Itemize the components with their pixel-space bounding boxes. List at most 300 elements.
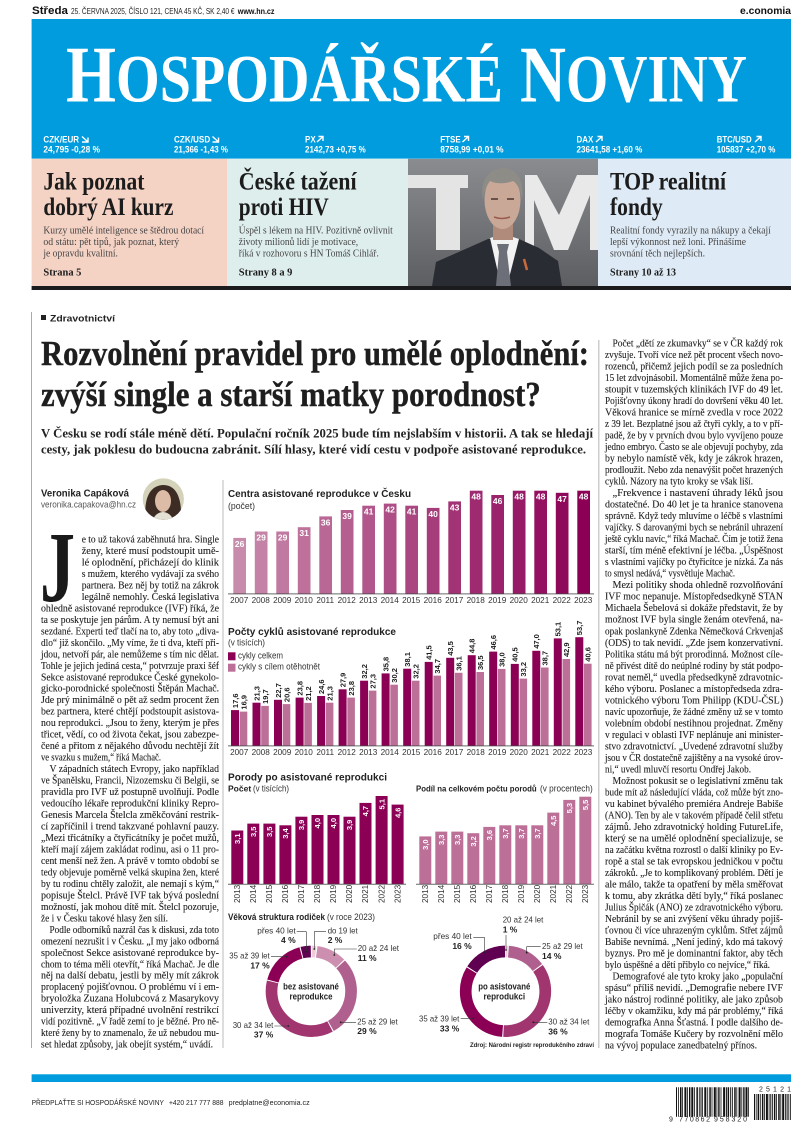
- value labels: 22,7: [274, 683, 283, 698]
- bar chart: porody počet: 2013: [233, 884, 242, 903]
- bar chart: Centra asistované reprodukce: 2010: [295, 596, 313, 605]
- bar chart: podíl na celkovém počtu porodů: 3,3: [453, 835, 462, 845]
- bar chart: Počty cyklů asistované reprodukce: 2007: [230, 748, 249, 757]
- bar chart: Centra asistované reprodukce: 2012: [338, 596, 356, 605]
- donut chart: po asistované reprodukci: [419, 915, 590, 1036]
- article text: left column: pravidla pro IVF už postupně uvolňují. Podle: [41, 786, 219, 798]
- value labels: 53,7: [575, 621, 584, 635]
- teaser panel: TOP realitní fondy: Realitní fondy vyrazily na nákupy a čekají: [610, 224, 771, 236]
- top date line: www.hn.cz: [237, 7, 274, 16]
- article text: right column: Věková hranice se mírně zvedla v roce 2022: [605, 407, 783, 419]
- bar chart: Centra asistované reprodukce: 2020: [510, 596, 528, 605]
- donut chart: po asistované reprodukci: 35 až 39 let: [419, 1013, 460, 1023]
- bar chart: Centra asistované reprodukce: 2018: [467, 596, 485, 605]
- bar chart: podíl na celkovém počtu porodů: 3,0: [421, 839, 430, 850]
- value labels: 24,6: [317, 679, 326, 694]
- teaser panel: HIV: říká v rozhovoru s HN Tomáš Cihlář.: [239, 248, 379, 260]
- footer subscription line: +420 217 777 888: [169, 1098, 224, 1107]
- bar chart: porody počet: 3,5: [265, 827, 274, 837]
- newspaper title: OSPODÁŘSKÉ: [116, 41, 503, 117]
- article text: right column: [604, 338, 783, 1052]
- bar chart: Počty cyklů asistované reprodukce: 2009: [273, 748, 292, 757]
- article text: left column: popisuje Štelcl. Právě IVF tak bývá poslední: [41, 889, 219, 901]
- footer subscription line: predplatne@economia.cz: [229, 1098, 310, 1107]
- bar chart: podíl na celkovém počtu porodů: 4,5: [549, 816, 558, 826]
- value labels: 53,1: [554, 622, 563, 636]
- newspaper title: H: [66, 30, 116, 120]
- heading: Věková struktura rodiček: Věková struktura rodiček: [228, 912, 326, 922]
- article text: right column: spásu“ příliš nevidí. „Demografie nebere IVF: [605, 982, 783, 994]
- bar chart: podíl na celkovém počtu porodů: 2023: [581, 884, 590, 903]
- article text: right column: jako nástroj rodinné politiky, ale jako způsob: [604, 994, 783, 1006]
- bar chart: porody počet: 4,7: [361, 806, 370, 816]
- bar chart: Centra asistované reprodukce: 40: [428, 509, 438, 519]
- bar chart: porody počet: 4,6: [393, 808, 402, 818]
- value labels: 43,5: [446, 641, 455, 656]
- donut chart: bez asistované reprodukce: 4 %: [281, 935, 296, 945]
- article text: left column: tedy objevuje poměrně velká skupina žen, které: [41, 866, 219, 878]
- article text: right column: kého výboru. Poslanec a místopředseda zdra-: [605, 683, 783, 695]
- bar chart: Centra asistované reprodukce: 31: [299, 528, 309, 538]
- article text: left column: ženy, které musí podstoupit umě-: [82, 545, 219, 557]
- bar chart: Centra asistované reprodukce: 46: [493, 496, 503, 506]
- article text: right column: bylo úspěšné a dětí přibylo co nejvíce,“ říká.: [605, 959, 770, 971]
- article text: left column: možností, jak mohou dítě mít. Štelcl pozoruje,: [41, 901, 219, 913]
- article text: left column: set hledat způsoby, jak obejít systém,“ uvádí.: [41, 1039, 213, 1051]
- article text: right column: dostatečné. Do 40 let je ta hranice stanovena: [605, 499, 783, 511]
- bar chart: porody počet: 3,5: [249, 827, 258, 837]
- photo: Tomáš Cihlář: [408, 159, 598, 286]
- barcode: 9: [669, 1117, 673, 1124]
- bar chart: podíl na celkovém počtu porodů: 2013: [421, 884, 430, 903]
- newspaper title: OVINY: [566, 41, 747, 117]
- bar chart: podíl na celkovém počtu porodů: Podíl na celkovém počtu porodů: [416, 784, 537, 794]
- donut chart: bez asistované reprodukce: 37 %: [254, 1030, 274, 1040]
- article text: left column: Podle odborníků nazrál čas k diskusi, zda toto: [50, 924, 219, 936]
- article text: left column: bez partnera, které chtějí podstoupit asistova-: [41, 706, 219, 718]
- article text: left column: ve Španělsku, Francii, Nizozemsku či Belgii, se: [41, 775, 219, 787]
- article text: left column: něj na další debatu, jestli by měly mít zákrok: [41, 970, 219, 982]
- bar chart: Centra asistované reprodukce: 2021: [531, 596, 550, 605]
- bar chart: Počty cyklů asistované reprodukce: 2011: [316, 748, 334, 757]
- article text: right column: ni,“ uvedl mluvčí resortu Ondřej Jakob.: [605, 763, 751, 775]
- bar chart: podíl na celkovém počtu porodů: 2018: [501, 884, 510, 903]
- drop cap: J: [40, 511, 75, 623]
- bar chart: Centra asistované reprodukce: 48: [536, 492, 546, 502]
- bar chart: podíl na celkovém počtu porodů: 2019: [517, 884, 526, 903]
- lead paragraph: [41, 427, 594, 456]
- value labels: 21,2: [304, 686, 313, 701]
- bar chart: Centra asistované reprodukce: (počet): [228, 501, 255, 511]
- value labels: [231, 621, 593, 710]
- heading: Věková struktura rodiček: (v roce 2023): [327, 912, 375, 922]
- donut chart: bez asistované reprodukce: reprodukce: [290, 992, 332, 1002]
- footer subscription line: [32, 1098, 310, 1107]
- bar chart: podíl na celkovém počtu porodů: 2016: [469, 884, 478, 903]
- bar chart: porody počet: 3,1: [233, 834, 242, 844]
- bar chart: Centra asistované reprodukce: 29: [278, 532, 288, 542]
- bar chart: Centra asistované reprodukce: 47: [557, 494, 567, 504]
- bar chart: Centra asistované reprodukce: 43: [450, 502, 460, 512]
- top date line: e.conomia: [740, 5, 791, 17]
- article text: left column: čené a přitom z nějakého důvodu nechtějí žít: [41, 740, 219, 752]
- donut chart: po asistované reprodukci: 1 %: [503, 925, 518, 935]
- bar chart: Počty cyklů asistované reprodukce: 2012: [338, 748, 356, 757]
- teaser panel: AI kurz: dobrý AI kurz: [43, 194, 173, 221]
- article text: right column: možnost IVF byla single ženám otevřená, na-: [605, 614, 783, 626]
- teaser panel: TOP realitní fondy: TOP realitní: [610, 168, 727, 195]
- article text: left column: sezdané. Experti teď tlačí na to, aby toto „diva-: [41, 625, 219, 637]
- bar chart: podíl na celkovém počtu porodů: 3,7: [501, 828, 510, 839]
- article text: left column: „Mezi třicátníky a čtyřicátníky je počet mužů,: [41, 832, 219, 844]
- article text: left column: dlo“ již skončilo. „My víme, že ti dva, kteří při-: [41, 637, 219, 649]
- main headline: [41, 334, 589, 414]
- footer subscription line: PŘEDPLAŤTE SI HOSPODÁŘSKÉ NOVINY: [32, 1098, 164, 1107]
- market tickers: 2142,73 +0,75 %: [305, 144, 366, 154]
- bar chart: podíl na celkovém počtu porodů: (v procentech): [540, 784, 593, 794]
- article text: left column: chom to téma měli otevřít,“ říká Machač. Je dle: [41, 958, 219, 970]
- bar chart: Centra asistované reprodukce: 48: [579, 492, 589, 502]
- donut chart: po asistované reprodukci: 20 až 24 let: [503, 915, 544, 925]
- article text: left column: V západních státech Evropy, jako například: [50, 763, 219, 775]
- article text: right column: Mezi politiky shoda ohledně rozvolňování: [612, 579, 783, 591]
- market tickers: 8758,99 +0,01 %: [440, 144, 504, 154]
- article text: right column: k tomu, aby zkrátka dětí byly,“ říká poslanec: [605, 890, 783, 902]
- bar chart: podíl na celkovém počtu porodů: 2022: [565, 884, 574, 903]
- market tickers: 105837 +2,70 %: [717, 144, 775, 154]
- donut chart: bez asistované reprodukce: do 19 let: [328, 925, 358, 935]
- donut chart: bez asistované reprodukce: [229, 925, 400, 1040]
- value labels: 42,9: [562, 642, 571, 657]
- barcode: 25121: [759, 1087, 791, 1094]
- bar chart: porody počet: 5,1: [377, 799, 386, 809]
- market tickers: 21,366 -1,43 %: [174, 144, 228, 154]
- top date line: Středa: [32, 5, 69, 17]
- article text: left column: vedoucího lékaře reprodukční kliniky Repro-: [41, 798, 219, 810]
- bar chart: Počty cyklů asistované reprodukce: (v tisících): [228, 638, 265, 648]
- bar chart: porody počet: 2021: [361, 884, 370, 903]
- value labels: 19,7: [261, 689, 270, 704]
- bar chart: porody počet: 2023: [393, 884, 402, 903]
- footer bar: [32, 1074, 791, 1082]
- donut chart: bez asistované reprodukce: 25 až 29 let: [357, 1016, 398, 1026]
- barcode: 958320: [714, 1117, 747, 1124]
- bar chart: porody počet: (v tisících): [253, 784, 289, 794]
- donut chart: po asistované reprodukci: přes 40 let: [433, 931, 472, 941]
- article text: left column: Tohle je jejich jediná cesta,“ potvrzuje praxi šéf: [41, 660, 219, 672]
- bar chart: Centra asistované reprodukce: 42: [385, 505, 395, 515]
- donut chart: bez asistované reprodukce: 30 až 34 let: [233, 1020, 274, 1030]
- value labels: 40,6: [584, 647, 593, 662]
- bar chart: Centra asistované reprodukce: 41: [364, 507, 374, 517]
- article text: left column: že i v Česku takové hlasy žen sílí.: [41, 912, 168, 924]
- heading: Porody po asistované reprodukci: Porody po asistované reprodukci: [228, 772, 387, 784]
- bar chart: Počty cyklů asistované reprodukce: 2014: [381, 748, 399, 757]
- article text: right column: cyklů. Názory na tyto kroky se však liší.: [605, 476, 753, 488]
- icon: author portrait: [143, 478, 184, 522]
- teaser panel: HIV: České tažení: [239, 166, 358, 195]
- bar chart: Centra asistované reprodukce: 2015: [402, 596, 421, 605]
- value labels: 23,8: [295, 681, 304, 696]
- value labels: 30,2: [390, 668, 399, 683]
- bar chart: Počty cyklů asistované reprodukce: 2010: [295, 748, 313, 757]
- bar chart: Centra asistované reprodukce: 2019: [488, 596, 507, 605]
- market tickers: CZK/USD: [174, 134, 211, 144]
- value labels: 33,2: [519, 662, 528, 677]
- bar chart: podíl na celkovém počtu porodů: 3,6: [485, 830, 494, 840]
- article text: right column: votnického výboru Tom Philipp (KDU-ČSL): [605, 694, 783, 706]
- bar chart: porody počet: 2018: [313, 884, 322, 903]
- bar chart: podíl na celkovém počtu porodů: 2020: [533, 884, 542, 903]
- article text: right column: mografa Tomáše Kučery by rozvolnění mělo: [605, 1028, 783, 1040]
- lead paragraph: V Česku se rodí stále méně dětí. Populační ročník 2025 bude tím nejslabším v historii. A tak se hledají: [41, 427, 594, 441]
- bar chart: Počty cyklů asistované reprodukce: 2016: [424, 748, 442, 757]
- teaser panel: HIV: životy milionů lidí je motivace,: [239, 236, 358, 248]
- teaser panel: AI kurz: Kurzy umělé inteligence se štědrou dotací: [43, 224, 204, 236]
- donut chart: po asistované reprodukci: reprodukci: [483, 992, 525, 1002]
- teaser panel: HIV: Úspěl s lékem na HIV. Pozitivně ovlivnit: [239, 224, 393, 236]
- bar chart: podíl na celkovém počtu porodů: 3,2: [469, 836, 478, 847]
- bar chart: porody počet: 4,0: [313, 818, 322, 828]
- bar chart: Počty cyklů asistované reprodukce: Počty cyklů asistované reprodukce: [228, 626, 396, 638]
- value labels: 20,6: [282, 687, 291, 702]
- bar chart: podíl na celkovém počtu porodů: 2014: [437, 884, 446, 903]
- bar chart: Centra asistované reprodukce: 2007: [230, 596, 249, 605]
- article text: right column: by nebylo namístě věk, kdy je zákrok hrazen,: [605, 453, 783, 465]
- bar chart: porody počet: 2020: [345, 884, 354, 903]
- bar chart: Centra asistované reprodukce: 39: [342, 511, 352, 521]
- value labels: 23,8: [347, 681, 356, 696]
- value labels: 16,9: [239, 695, 248, 710]
- article text: right column: na vývoj populace zanedbatelný přínos.: [605, 1040, 757, 1052]
- donut chart: po asistované reprodukci: po asistované: [478, 982, 530, 992]
- value labels: 38,1: [403, 652, 412, 667]
- value labels: 27,3: [368, 674, 377, 689]
- value labels: 41,5: [424, 645, 434, 660]
- article text: left column: cent menší než žen. A právě v tomto období se: [41, 855, 219, 867]
- article text: right column: „Frekvence i nastavení úhrady léků jsou: [612, 487, 783, 499]
- article text: left column: jdou, netvoří pár, ale nemůžeme s tím nic dělat.: [40, 648, 219, 660]
- bar chart: porody počet: 3,9: [345, 820, 354, 830]
- barcode: [669, 1087, 791, 1124]
- top date line: [32, 5, 791, 17]
- article text: left column: Jde prý minimálně o pět až sedm procent žen: [41, 694, 219, 706]
- teaser panel: TOP realitní fondy: Strany 10 až 13: [610, 266, 676, 278]
- value labels: 21,3: [325, 686, 334, 701]
- article text: left column: nou reprodukci. „Jsou to ženy, kterým je přes: [41, 717, 219, 729]
- donut chart: po asistované reprodukci: 25 až 29 let: [542, 941, 583, 951]
- bar chart: Počty cyklů asistované reprodukce: 2019: [488, 748, 507, 757]
- value labels: 44,8: [468, 639, 476, 653]
- bar chart: Počty cyklů asistované reprodukce: 2021: [531, 748, 550, 757]
- donut chart: bez asistované reprodukce: bez asistované: [283, 982, 339, 992]
- donut chart: po asistované reprodukci: 16 %: [452, 941, 472, 951]
- article text: right column: to smysl nedává,“ vysvětluje Machač.: [605, 568, 735, 580]
- article text: left column: Genesis Marcela Štelcla změkčování restrik-: [41, 809, 219, 821]
- market tickers: [43, 134, 775, 154]
- donut chart: bez asistované reprodukce: 17 %: [250, 960, 270, 970]
- article text: left column: Sekce asistované reprodukce České gynekolo-: [41, 671, 219, 683]
- donut chart: bez asistované reprodukce: 35 až 39 let: [229, 950, 270, 960]
- value labels: 40,5: [511, 647, 520, 662]
- donut chart: po asistované reprodukci: 36 %: [548, 1026, 568, 1036]
- article text: left column: které ženy by to znamenalo, že už nebudou mu-: [41, 1027, 219, 1039]
- teaser panel: TOP realitní fondy: lepší výkonnost než loni. Přinášíme: [610, 236, 746, 248]
- teaser panel: TOP realitní fondy: [598, 159, 791, 286]
- teaser panel: HIV: proti HIV: [239, 194, 329, 221]
- teaser panel: AI kurz: Jak poznat: [43, 168, 145, 195]
- article text: left column: ve svazku s mužem,“ říká Machač.: [41, 752, 161, 764]
- bar chart: Počty cyklů asistované reprodukce: [228, 621, 594, 757]
- donut chart: po asistované reprodukci: 14 %: [542, 951, 562, 961]
- bar chart: porody počet: 2015: [265, 884, 274, 903]
- value labels: 27,9: [338, 673, 347, 687]
- market tickers: PX: [305, 134, 316, 144]
- bar chart: podíl na celkovém počtu porodů: 2017: [485, 884, 494, 903]
- article text: left column: [40, 534, 219, 1051]
- top date line: 25. ČERVNA 2025, ČÍSLO 121, CENA 45 KČ, SK 2,40 €: [71, 7, 235, 16]
- bar chart: Počty cyklů asistované reprodukce: 2018: [467, 748, 485, 757]
- market tickers: 24,795 -0,28 %: [43, 144, 100, 154]
- value labels: 47,0: [532, 634, 541, 649]
- donut chart: bez asistované reprodukce: 20 až 24 let: [358, 943, 400, 953]
- masthead panel: [32, 19, 791, 159]
- author byline: veronika.capakova@hn.cz: [41, 499, 136, 509]
- article text: left column: proplacený pojišťovnou. O problému ví i em-: [41, 981, 219, 993]
- article text: left column: legálně nemohly. Česká legislativa: [82, 591, 219, 603]
- bar chart: porody počet: 2016: [281, 884, 290, 903]
- bar chart: Centra asistované reprodukce: 2011: [316, 596, 334, 605]
- bar chart: Počty cyklů asistované reprodukce: 2013: [359, 748, 378, 757]
- article text: left column: univerzity, která případné uvolnění restrikcí: [41, 1004, 219, 1016]
- newspaper title: N: [520, 30, 566, 120]
- bar chart: Centra asistované reprodukce: 2017: [445, 596, 464, 605]
- value labels: 32,2: [360, 664, 369, 679]
- bar chart: Centra asistované reprodukce: Centra asistované reprodukce v Česku: [228, 487, 411, 500]
- bar chart: Centra asistované reprodukce: [228, 487, 594, 605]
- article text: left column: společnost Sekce asistované reprodukce by-: [41, 947, 219, 959]
- value labels: 32,2: [412, 664, 420, 679]
- black divider bar: [32, 286, 791, 290]
- bar chart: Centra asistované reprodukce: 2014: [381, 596, 399, 605]
- bar chart: porody počet: 4,0: [329, 818, 338, 828]
- newspaper title: [66, 30, 747, 120]
- bar chart: Centra asistované reprodukce: 41: [407, 507, 417, 517]
- article text: left column: by tu rodinu chtěly založit, ale nemají s kým,“: [41, 878, 219, 890]
- bar chart: porody počet: 2014: [249, 884, 258, 903]
- column rules: [31, 312, 600, 1048]
- value labels: 35,8: [381, 657, 390, 671]
- article text: right column: ale málo, takže ta opatření by měla směřovat: [605, 878, 783, 890]
- market tickers: BTC/USD: [717, 134, 752, 144]
- bar chart: podíl na celkovém počtu porodů: 3,3: [437, 835, 446, 845]
- bar chart: podíl na celkovém počtu porodů: 2021: [549, 884, 558, 903]
- author byline: Veronika Capáková: [41, 489, 129, 500]
- bar chart: podíl na celkovém počtu porodů: 3,7: [533, 828, 542, 839]
- article text: left column: bryoložka Zuzana Holubcová z Masarykovy: [41, 993, 219, 1005]
- bar chart: Počty cyklů asistované reprodukce: 2008: [252, 748, 270, 757]
- bar chart: porody počet: 2017: [297, 884, 306, 903]
- bar chart: Centra asistované reprodukce: 36: [321, 517, 331, 527]
- donut chart: bez asistované reprodukce: 11 %: [358, 953, 377, 963]
- bar chart: podíl na celkovém počtu porodů: [416, 784, 594, 903]
- bar chart: Centra asistované reprodukce: 2022: [553, 596, 571, 605]
- bar chart: porody počet: 3,4: [281, 827, 290, 839]
- bar chart: porody počet: 2022: [377, 884, 386, 903]
- bar chart: Centra asistované reprodukce: 48: [514, 492, 524, 502]
- market tickers: 23641,58 +1,60 %: [576, 144, 642, 154]
- bar chart: Centra asistované reprodukce: 2009: [273, 596, 292, 605]
- bar chart: Počty cyklů asistované reprodukce: 2020: [510, 748, 528, 757]
- bar chart: podíl na celkovém počtu porodů: 5,5: [581, 800, 590, 810]
- legend: cykly s cílem otěhotnět: [238, 661, 320, 671]
- donut chart: po asistované reprodukci: 33 %: [440, 1024, 460, 1034]
- bar chart: Počty cyklů asistované reprodukce: 2023: [574, 748, 593, 757]
- market tickers: DAX: [576, 134, 593, 144]
- teaser panel: TOP realitní fondy: fondy: [610, 194, 663, 221]
- article text: left column: cí zapříčinil i trend takzvané pohlavní pauzy.: [41, 820, 219, 832]
- bar chart: Počty cyklů asistované reprodukce: 2017: [445, 748, 464, 757]
- section kicker: Zdravotnictví: [50, 313, 115, 324]
- legend: cykly celkem: [238, 650, 283, 660]
- source note: Zdroj: Národní registr reprodukčního zdraví: [470, 1042, 594, 1049]
- donut chart: bez asistované reprodukce: 2 %: [328, 935, 343, 945]
- lead paragraph: cesty, jak poklesu do budoucna zabránit. Sílí hlasy, které vidí cestu v podpoře asistované reprodukce.: [41, 442, 586, 456]
- teaser panel: AI kurz: je opravdu kvalitní.: [43, 248, 118, 260]
- bar chart: podíl na celkovém počtu porodů: 3,7: [517, 828, 526, 839]
- main headline: Rozvolnění pravidel pro umělé oplodnění:: [41, 334, 589, 373]
- article text: right column: IVF moc nepanuje. Místopředsedkyně STAN: [605, 591, 783, 603]
- value labels: 34,7: [433, 659, 442, 674]
- article text: left column: vidí pozitivně. „V řadě zemí to je běžné. Pro ně-: [41, 1016, 219, 1028]
- bar chart: porody počet: [228, 784, 406, 903]
- value labels: 17,6: [231, 693, 240, 708]
- article text: left column: e to už taková zaběhnutá hra. Single: [82, 534, 219, 546]
- dark bars: cykly celkem: [231, 637, 583, 746]
- teaser panel: HIV: Strany 8 a 9: [239, 266, 293, 278]
- value labels: 36,1: [454, 656, 464, 671]
- main headline: zvýší single a starší matky porodnost?: [41, 375, 541, 414]
- bar chart: Centra asistované reprodukce: 2013: [359, 596, 378, 605]
- bar chart: Centra asistované reprodukce: 48: [471, 492, 481, 502]
- teaser panel: TOP realitní fondy: srovnání těch nejlepších.: [610, 248, 705, 260]
- value labels: 46,6: [489, 635, 498, 650]
- article text: left column: kteří mají zájem zakládat rodinu, asi o 11 pro-: [41, 844, 219, 856]
- author byline: [41, 478, 184, 522]
- value labels: 21,3: [252, 686, 261, 701]
- bar chart: porody počet: 3,9: [297, 820, 306, 830]
- teaser panel: HIV: [227, 159, 408, 286]
- article text: left column: třicet, vědí, co od života čekat, jsou zabezpe-: [41, 729, 219, 741]
- bar chart: Centra asistované reprodukce: 2016: [424, 596, 442, 605]
- light bars: cykly s cílem otěhotnět: [240, 659, 592, 746]
- bar chart: Centra asistované reprodukce: 2008: [252, 596, 270, 605]
- value labels: 38,7: [541, 651, 550, 666]
- bar chart: Centra asistované reprodukce: 2023: [574, 596, 593, 605]
- article text: left column: omezení nezrušit i v Česku. „I my jako odborná: [41, 935, 219, 947]
- teaser panel: AI kurz: od státu: pět tipů, jak poznat, který: [43, 236, 180, 248]
- bar chart: porody počet: Počet: [228, 784, 251, 794]
- bar chart: porody počet: 2019: [329, 884, 338, 903]
- donut chart: bez asistované reprodukce: přes 40 let: [257, 925, 296, 935]
- market tickers: CZK/EUR: [43, 134, 80, 144]
- article text: right column: který se na umělé oplodnění specializuje, se: [605, 832, 783, 844]
- article text: left column: ta se poskytuje jen párům. A ty nemusí být ani: [41, 614, 219, 626]
- legend: [228, 650, 320, 672]
- value labels: 38,0: [498, 652, 506, 667]
- bar chart: podíl na celkovém počtu porodů: 5,3: [565, 803, 574, 813]
- donut chart: bez asistované reprodukce: 29 %: [357, 1026, 377, 1036]
